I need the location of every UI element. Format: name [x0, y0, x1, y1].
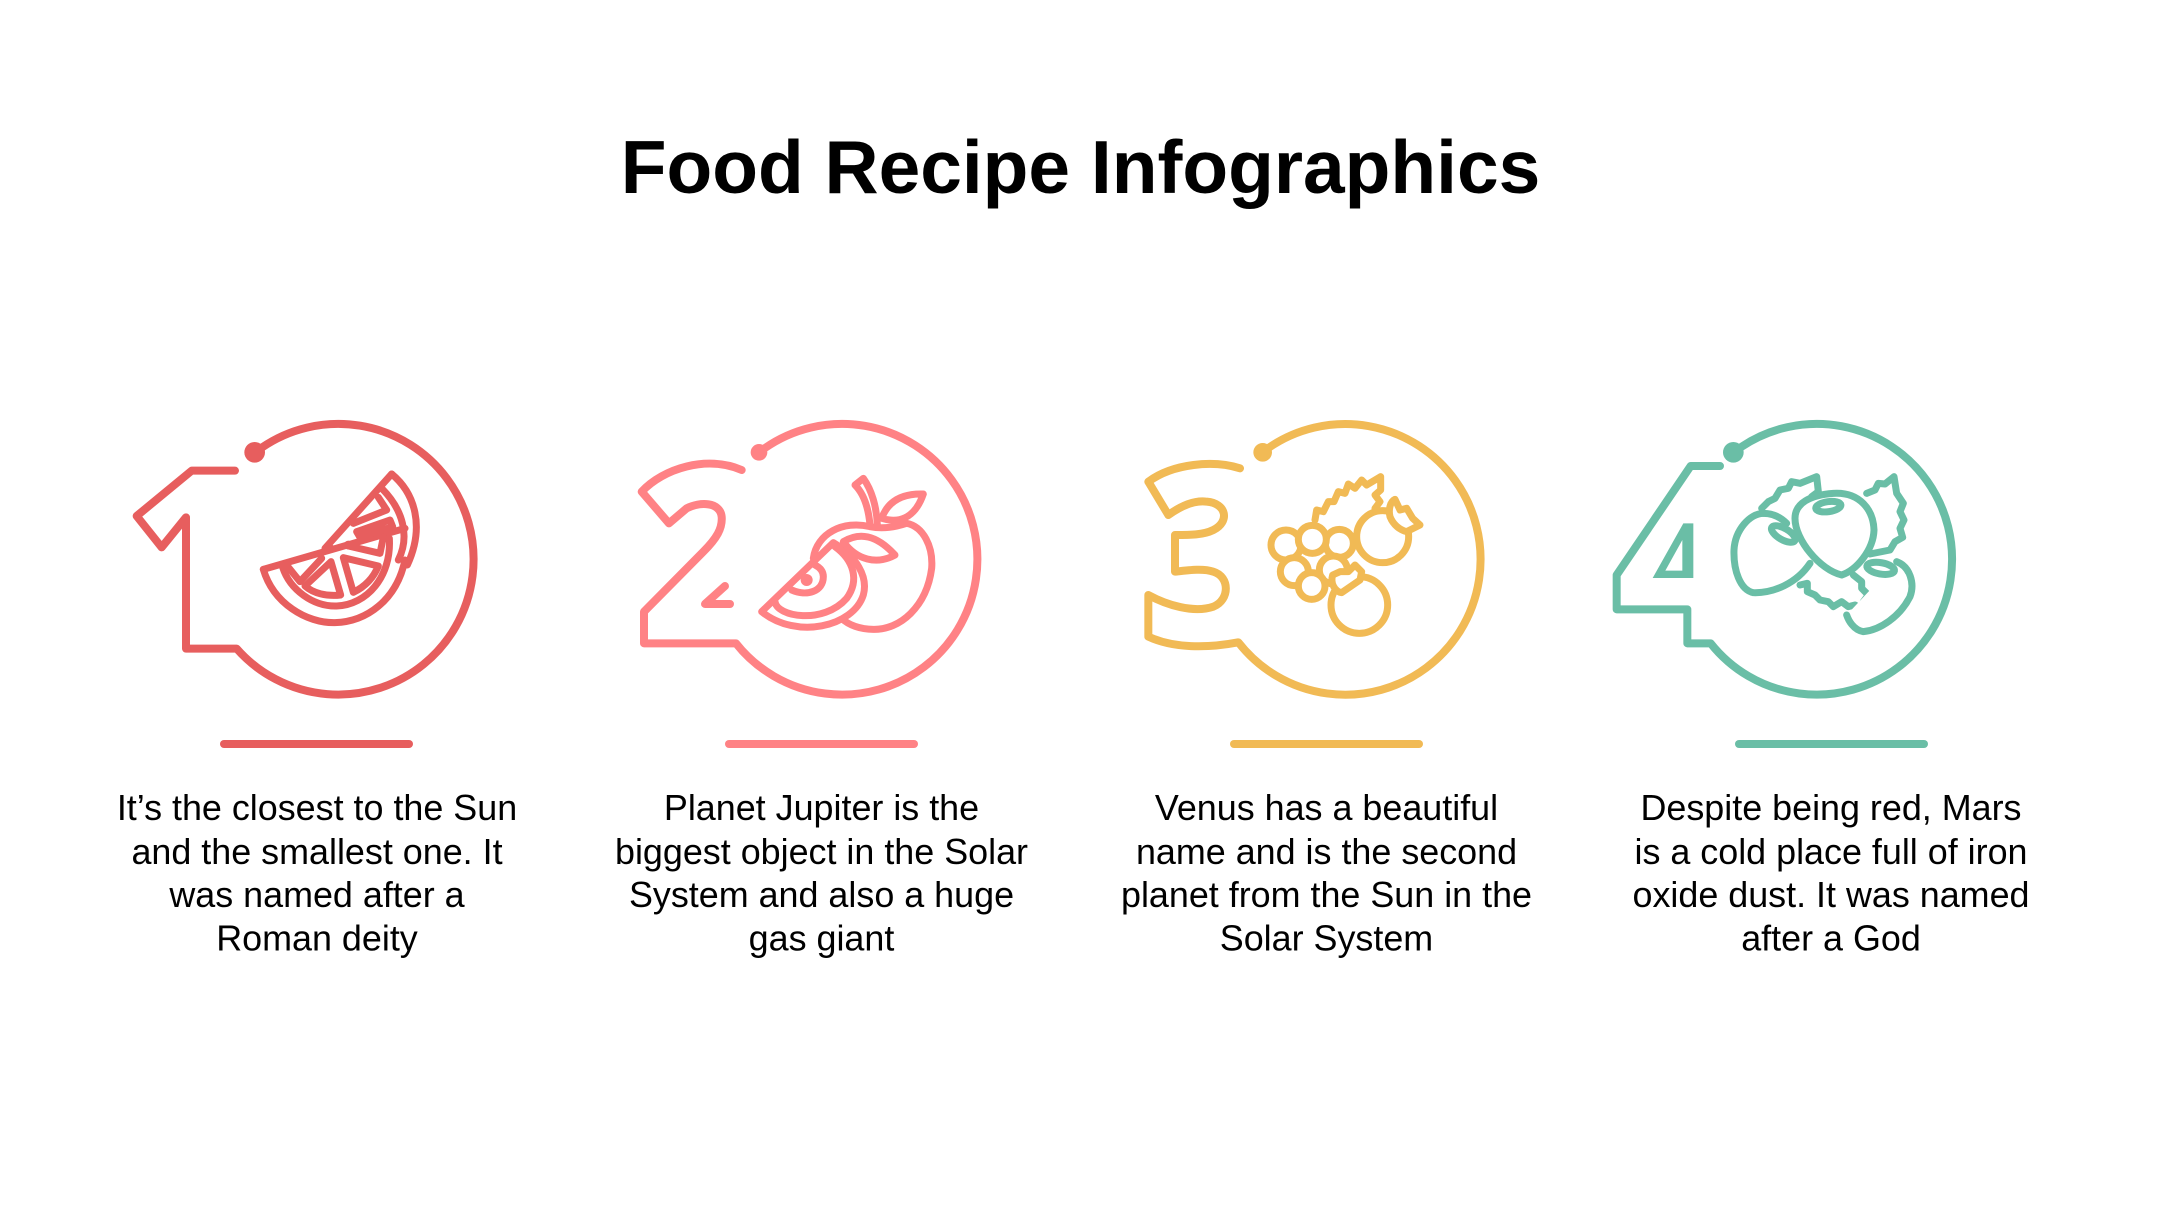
number 1 and ring: [137, 424, 474, 695]
text block 3: Venus has a beautiful: [1155, 788, 1498, 828]
panel: step 4: [1617, 424, 2030, 958]
text block 2: gas giant: [749, 918, 894, 958]
text block 4: after a God: [1741, 918, 1921, 958]
text block 3: planet from the Sun in the: [1121, 875, 1532, 915]
text block 2: Planet Jupiter is the: [664, 788, 979, 828]
text block 4: [1632, 788, 2030, 958]
text block 3: Solar System: [1220, 918, 1433, 958]
text block 3: [1121, 788, 1532, 958]
divider bar 4: [1735, 740, 1928, 748]
text block 4: oxide dust. It was named: [1632, 875, 2030, 915]
text block 1: Roman deity: [216, 918, 418, 958]
panel: step 2: [615, 424, 1028, 958]
text block 1: and the smallest one. It: [131, 832, 503, 872]
text block 2: System and also a huge: [629, 875, 1014, 915]
text block 3: name and is the second: [1136, 832, 1517, 872]
divider bar 3: [1230, 740, 1423, 748]
panel: step 1: [117, 424, 517, 959]
number 2 and ring: [642, 424, 977, 695]
divider bar 2: [725, 740, 918, 748]
divider bar 1: [220, 740, 413, 748]
number 4 and ring: [1617, 424, 1952, 695]
text block 4: Despite being red, Mars: [1640, 788, 2022, 828]
text block 1: [117, 788, 517, 958]
panel: step 3: [1121, 424, 1532, 958]
text block 1: It’s the closest to the Sun: [117, 788, 517, 828]
text block 2: [615, 788, 1028, 958]
icon: apple with slice: [762, 478, 932, 629]
icon: strawberries and leaves: [1734, 477, 1912, 632]
text block 4: is a cold place full of iron: [1634, 832, 2028, 872]
icon: orange slices: [263, 474, 416, 623]
icon: berries: [1271, 477, 1420, 633]
number 3 and ring: [1148, 424, 1481, 695]
text block 2: biggest object in the Solar: [615, 832, 1028, 872]
text block 1: was named after a: [168, 875, 465, 915]
title: Food Recipe Infographics: [621, 125, 1540, 209]
